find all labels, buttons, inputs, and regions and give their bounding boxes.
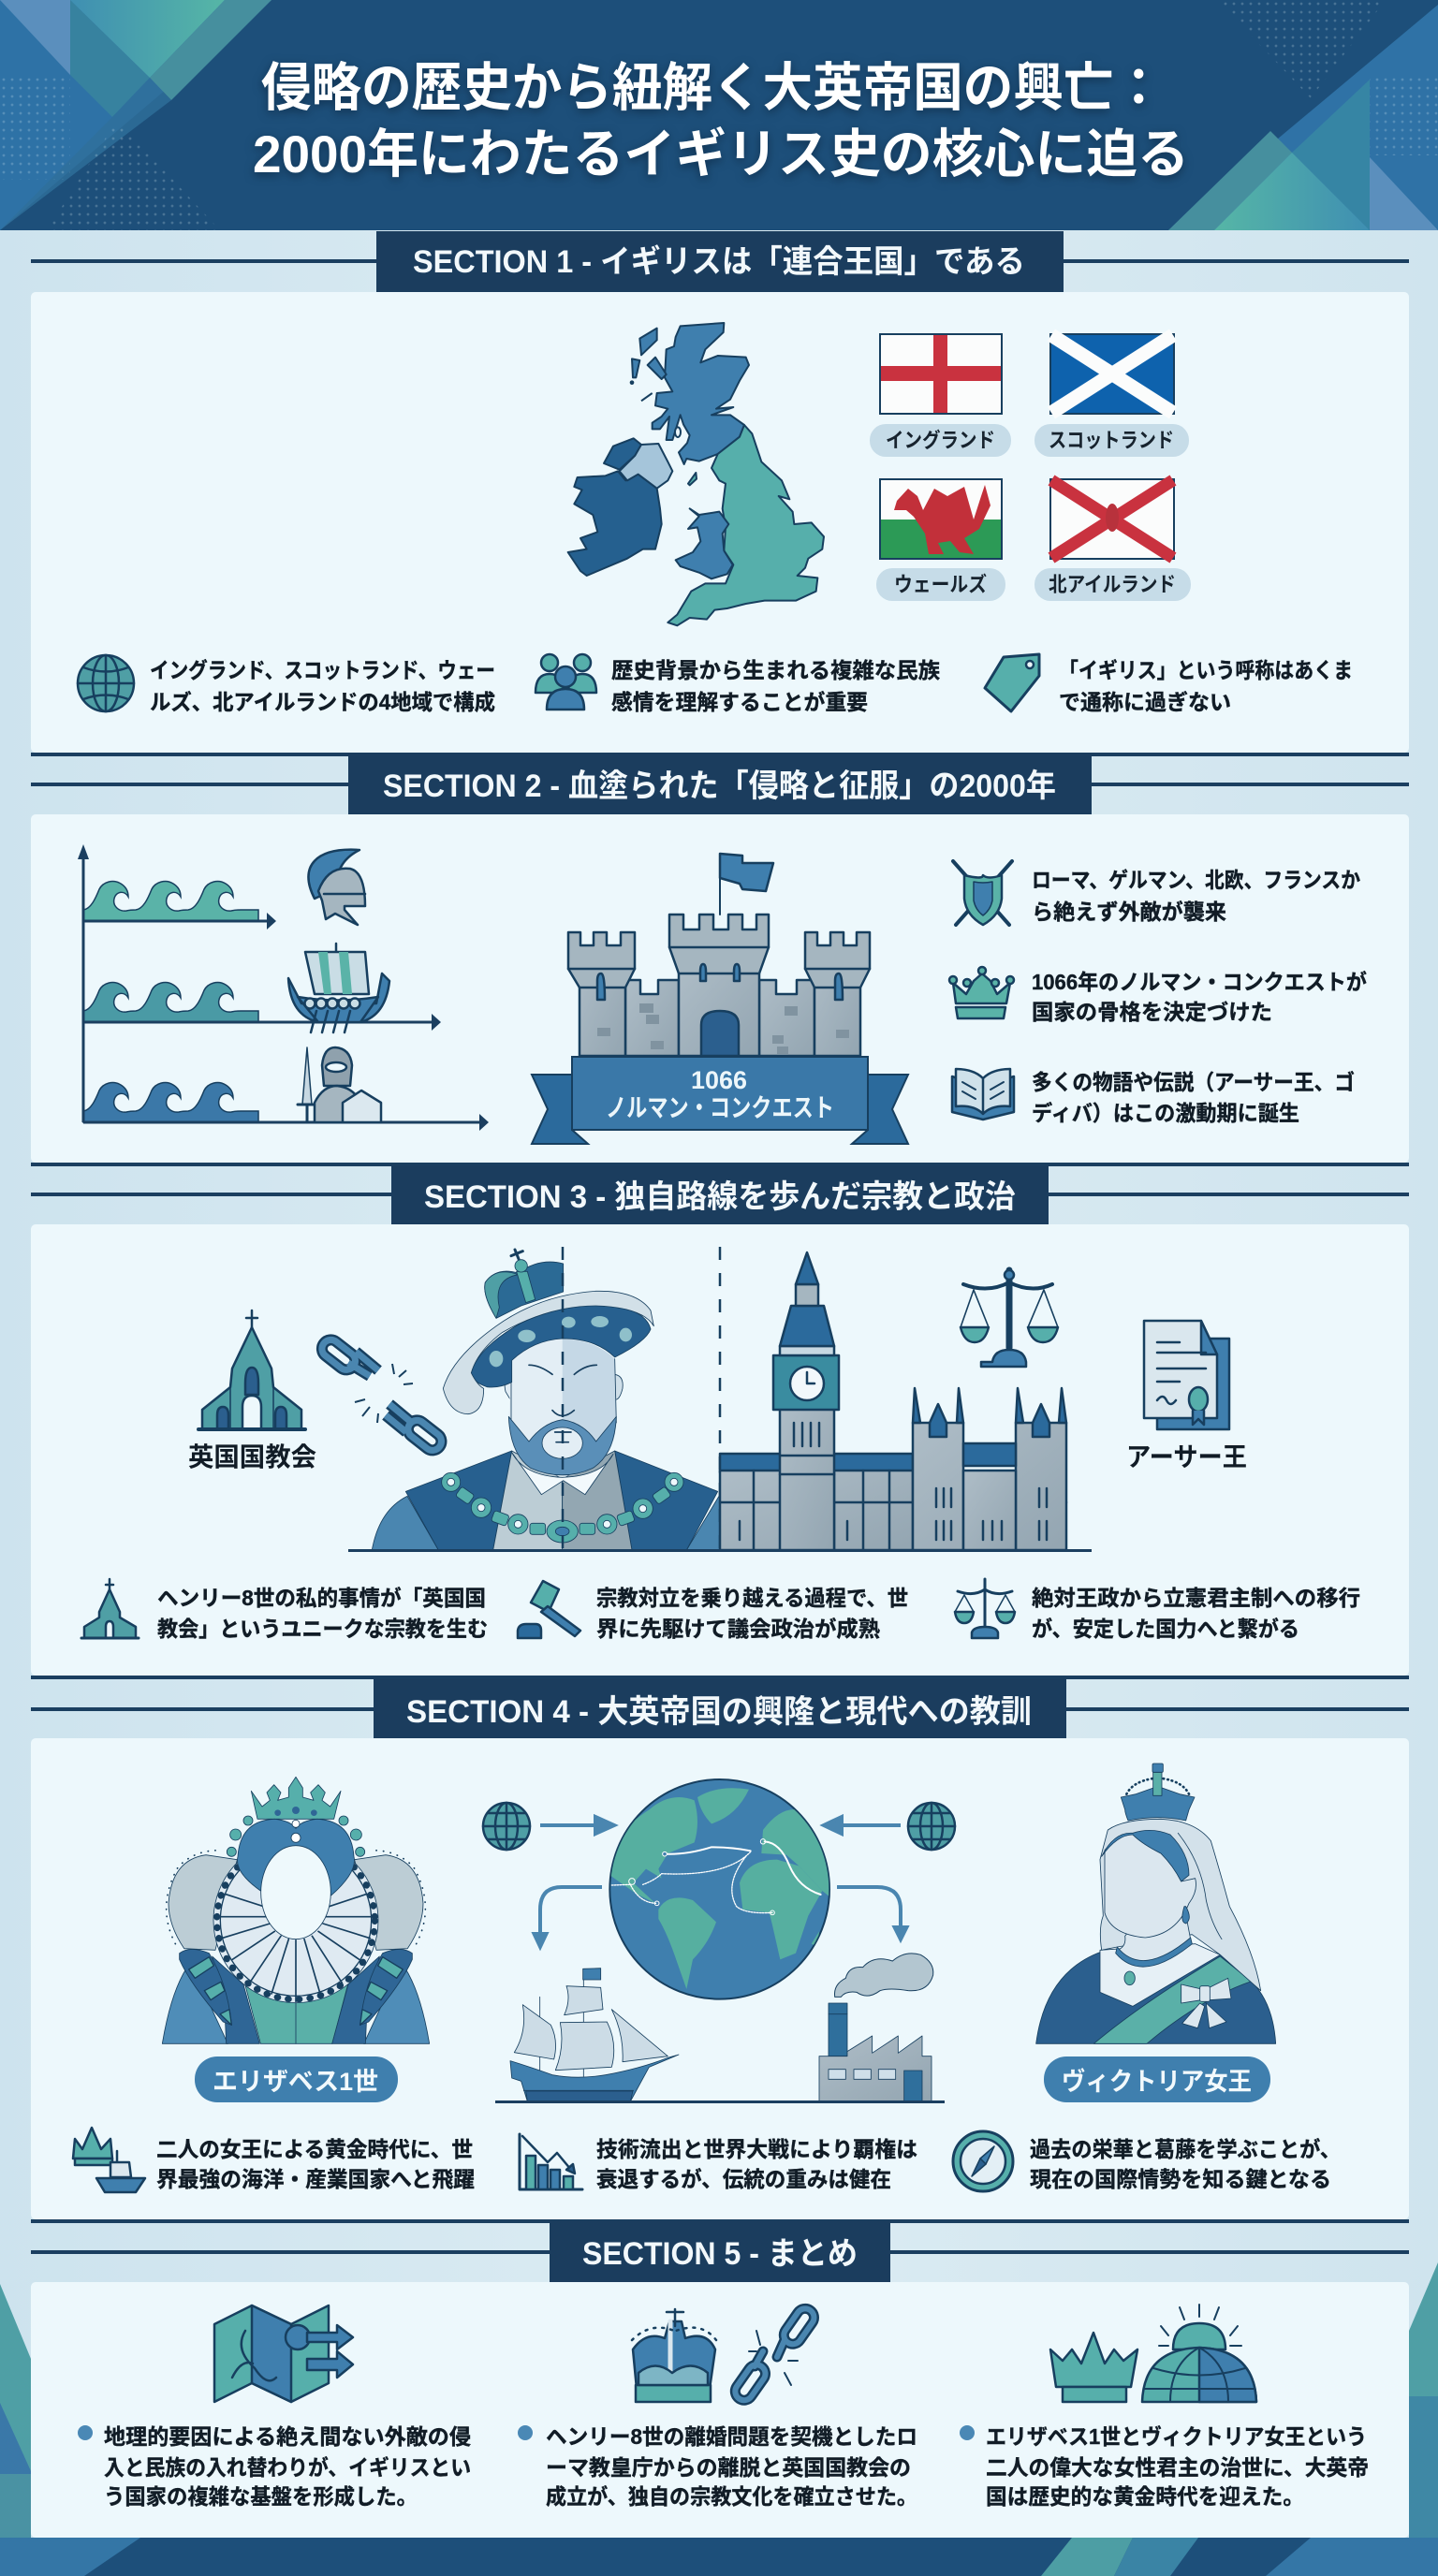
text: legends	[1032, 1070, 1355, 1125]
label: King Arthur: アーサー王	[1126, 1442, 1247, 1471]
panel: section 3	[31, 1224, 1409, 1676]
text: lesson: 現在の国際情勢を知る鍵となる	[1030, 2167, 1331, 2191]
text: Henry VIII	[157, 1586, 488, 1641]
label: Victoria: ヴィクトリア女王	[1062, 2067, 1252, 2096]
bullet and text: geography: 入と民族の入れ替わりが、イギリスとい	[104, 2455, 471, 2480]
text: parliament	[596, 1586, 908, 1641]
text: parliament: 宗教対立を乗り越える過程で、世	[596, 1586, 908, 1610]
icon: balance scales	[961, 1270, 1058, 1367]
rule lines	[31, 259, 1409, 263]
portrait: Elizabeth I	[162, 1777, 430, 2043]
banner: 1066 Norman Conquest: ノルマン・コンクエスト	[606, 1094, 834, 1122]
arrow: inward right	[824, 1817, 901, 1834]
flag: Scotland	[1050, 334, 1174, 414]
text: name note	[1059, 658, 1353, 714]
icon: open book	[952, 1069, 1014, 1120]
icon: people	[536, 654, 596, 710]
flag: Wales	[880, 479, 1002, 559]
portrait: Henry VIII	[372, 1250, 720, 1550]
section 4 heading: SECTION 4 - 大英帝国の興隆と現代への教訓	[406, 1694, 1032, 1730]
text: 1066	[1032, 970, 1367, 1024]
icon: small church	[81, 1579, 139, 1638]
flag labels: スコットランド	[1049, 429, 1174, 452]
title	[253, 58, 1189, 183]
panel: section 4	[31, 1738, 1409, 2219]
text: invaders: ローマ、ゲルマン、北欧、フランスか	[1032, 868, 1360, 892]
bullet and text: Henry VIII: 成立が、独自の宗教文化を確立させた。	[546, 2484, 917, 2509]
ground line	[495, 2100, 945, 2103]
section 4 heading	[374, 1679, 1066, 1738]
banner: 1066 Norman Conquest	[532, 1057, 908, 1144]
icon: globe	[78, 655, 134, 711]
bullet and text: queens	[960, 2424, 1369, 2509]
panel: section 2	[31, 814, 1409, 1163]
bullet and text: geography: 地理的要因による絶え間ない外敵の侵	[104, 2424, 471, 2449]
icon: crown	[949, 967, 1014, 1018]
text: ethnic feelings: 歴史背景から生まれる複雑な民族	[611, 658, 940, 682]
illustration: sailing ship	[510, 1969, 679, 2101]
bullet and text: geography: う国家の複雑な基盤を形成した。	[104, 2484, 418, 2509]
bullet and text: geography	[78, 2424, 471, 2509]
bullet and text: Henry VIII: ヘンリー8世の離婚問題を契機としたロ	[546, 2424, 917, 2449]
ground line	[348, 1549, 1092, 1552]
text: parliament: 界に先駆けて議会政治が成熟	[596, 1617, 880, 1641]
icon: folded map	[214, 2305, 353, 2402]
text: invaders: ら絶えず外敵が襲来	[1032, 900, 1226, 924]
globe with trade routes	[606, 1779, 836, 1999]
bullet and text: queens: 国は歴史的な黄金時代を迎えた。	[986, 2484, 1304, 2509]
flag labels: ウェールズ	[894, 573, 987, 596]
label: Elizabeth I: エリザベス1世	[213, 2068, 378, 2096]
header band	[0, 0, 1438, 230]
text: 1066: 国家の骨格を決定づけた	[1032, 1000, 1272, 1024]
text: ethnic feelings	[611, 658, 940, 714]
text: name note: 「イギリス」という呼称はあくま	[1059, 658, 1353, 682]
portrait: Victoria	[1036, 1764, 1276, 2043]
center dashed dividers	[563, 1247, 720, 1550]
icon: crown and broken chain	[632, 2305, 817, 2404]
icon: small globe right	[908, 1803, 955, 1850]
section 2 heading	[348, 754, 1092, 814]
icon: Roman helmet	[308, 850, 365, 925]
icon: broken chain	[318, 1337, 445, 1454]
label: Victoria	[1044, 2056, 1270, 2102]
flag: Northern Ireland	[1050, 479, 1174, 559]
section 2 heading: SECTION 2 - 血塗られた「侵略と征服」の2000年	[383, 768, 1056, 804]
text: golden age	[156, 2137, 475, 2191]
section 5 heading	[550, 2221, 890, 2282]
section 3 heading	[391, 1165, 1049, 1224]
text: name note: で通称に過ぎない	[1059, 690, 1231, 714]
illustration: factory	[819, 1954, 933, 2101]
castle	[568, 854, 870, 1056]
icon: Viking ship	[288, 944, 389, 1032]
text: 1066: 1066年のノルマン・コンクエストが	[1032, 970, 1367, 994]
bullet and text: Henry VIII: ーマ教皇庁からの離脱と英国国教会の	[546, 2455, 911, 2480]
bullet and text: queens: 二人の偉大な女性君主の治世に、大英帝	[986, 2455, 1369, 2480]
icon: gavel	[518, 1581, 580, 1638]
flag: England	[880, 334, 1002, 414]
bullet and text: queens: エリザベス1世とヴィクトリア女王という	[986, 2424, 1367, 2449]
text: decline: 技術流出と世界大戦により覇権は	[596, 2137, 917, 2161]
text: ethnic feelings: 感情を理解することが重要	[611, 690, 868, 714]
icon: small scales	[955, 1579, 1015, 1638]
text: decline: 衰退するが、伝統の重みは健在	[596, 2167, 891, 2191]
icon: Norman knight	[298, 1047, 381, 1122]
section 1 heading	[376, 231, 1064, 292]
icon: compass	[953, 2131, 1013, 2191]
text: constitutional monarchy	[1032, 1586, 1360, 1641]
icon: tag	[985, 654, 1039, 711]
icon: crown and sunrise globe	[1050, 2305, 1256, 2402]
icon: church	[198, 1310, 305, 1429]
flag labels	[870, 424, 1191, 601]
label: Elizabeth I	[195, 2056, 398, 2102]
arrow: to ship	[533, 1887, 602, 1949]
bullet and text: Henry VIII	[518, 2424, 917, 2509]
icon: small globe left	[483, 1803, 530, 1850]
section 3 heading: SECTION 3 - 独自路線を歩んだ宗教と政治	[424, 1179, 1016, 1215]
banner: 1066 Norman Conquest: 1066	[691, 1066, 747, 1094]
section 1 heading: SECTION 1 - イギリスは「連合王国」である	[413, 244, 1025, 280]
text: four regions: イングランド、スコットランド、ウェー	[150, 658, 495, 682]
flag labels: 北アイルランド	[1049, 573, 1176, 596]
arrow: inward left	[540, 1817, 614, 1834]
panel: section 5	[31, 2282, 1409, 2538]
icon: declining chart	[520, 2134, 582, 2189]
text: lesson	[1030, 2137, 1341, 2191]
text: four regions	[150, 658, 495, 714]
flag labels: イングランド	[886, 429, 995, 452]
text: legends: 多くの物語や伝説（アーサー王、ゴ	[1032, 1070, 1355, 1094]
text: golden age: 界最強の海洋・産業国家へと飛躍	[156, 2167, 475, 2191]
text: lesson: 過去の栄華と葛藤を学ぶことが、	[1030, 2137, 1341, 2161]
bottom background decoration	[0, 2262, 1438, 2576]
text: constitutional monarchy: 絶対王政から立憲君主制への移行	[1032, 1586, 1360, 1610]
text: four regions: ルズ、北アイルランドの4地域で構成	[150, 690, 495, 714]
text: golden age: 二人の女王による黄金時代に、世	[156, 2137, 473, 2161]
text: constitutional monarchy: が、安定した国力へと繋がる	[1032, 1617, 1299, 1641]
section 5 heading: SECTION 5 - まとめ	[582, 2236, 858, 2272]
map of the British Isles	[568, 323, 824, 625]
text: Henry VIII: 教会」というユニークな宗教を生む	[157, 1617, 488, 1641]
icon: shield and swords	[953, 861, 1012, 925]
icon: document	[1144, 1321, 1229, 1429]
title: 2000年にわたるイギリス史の核心に迫る	[253, 124, 1189, 183]
panel: section 1	[31, 292, 1409, 753]
text: decline	[596, 2137, 917, 2191]
illustration: Parliament and Big Ben	[720, 1252, 1066, 1550]
icon: crown and ship	[73, 2128, 145, 2192]
text: invaders	[1032, 868, 1360, 924]
label: Church of England: 英国国教会	[188, 1442, 316, 1471]
title: 侵略の歴史から紐解く大英帝国の興亡：	[261, 58, 1164, 117]
arrow: to factory	[837, 1887, 908, 1941]
invasion timeline chart	[78, 844, 489, 1131]
text: legends: ディバ）はこの激動期に誕生	[1032, 1101, 1299, 1125]
text: Henry VIII: ヘンリー8世の私的事情が「英国国	[157, 1586, 486, 1610]
